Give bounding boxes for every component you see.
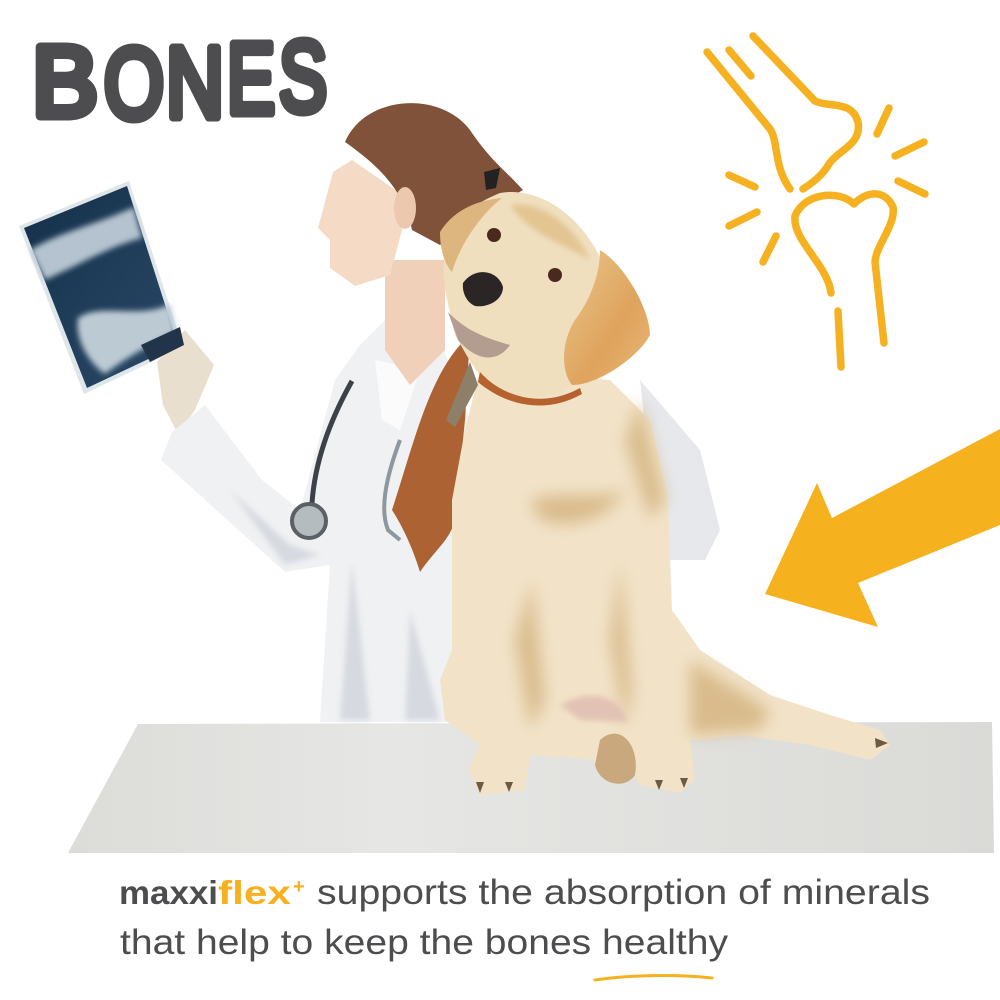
table: [68, 722, 994, 853]
caption: supports the absorption of minerals: [317, 873, 930, 912]
caption: maxxi: [119, 874, 218, 911]
underline: [595, 976, 712, 980]
title: O: [104, 28, 164, 140]
title: B: [32, 26, 98, 138]
dog body: [440, 370, 890, 795]
caption line 2: that help to keep the bones healthy: [120, 923, 729, 962]
dog ears: [440, 198, 502, 272]
title: S: [279, 21, 327, 133]
stethoscope: [292, 381, 400, 540]
glove hand: [157, 330, 214, 434]
caption: flex: [218, 874, 292, 911]
caption: [119, 873, 930, 912]
title: [32, 21, 327, 140]
icon: bone joint: [707, 36, 925, 367]
hair: [345, 103, 523, 245]
collar: [478, 372, 582, 405]
coat: [161, 310, 470, 722]
arrow: [765, 429, 1000, 627]
dog eyes and nose: [487, 228, 501, 242]
dog head: [444, 192, 605, 400]
x-ray film: [19, 181, 183, 394]
vet and dog photo: [19, 103, 890, 795]
neck and face: [385, 260, 445, 385]
title: E: [227, 23, 275, 135]
dog fur shading: [515, 400, 770, 735]
title: N: [166, 27, 224, 139]
caption: +: [293, 876, 305, 898]
